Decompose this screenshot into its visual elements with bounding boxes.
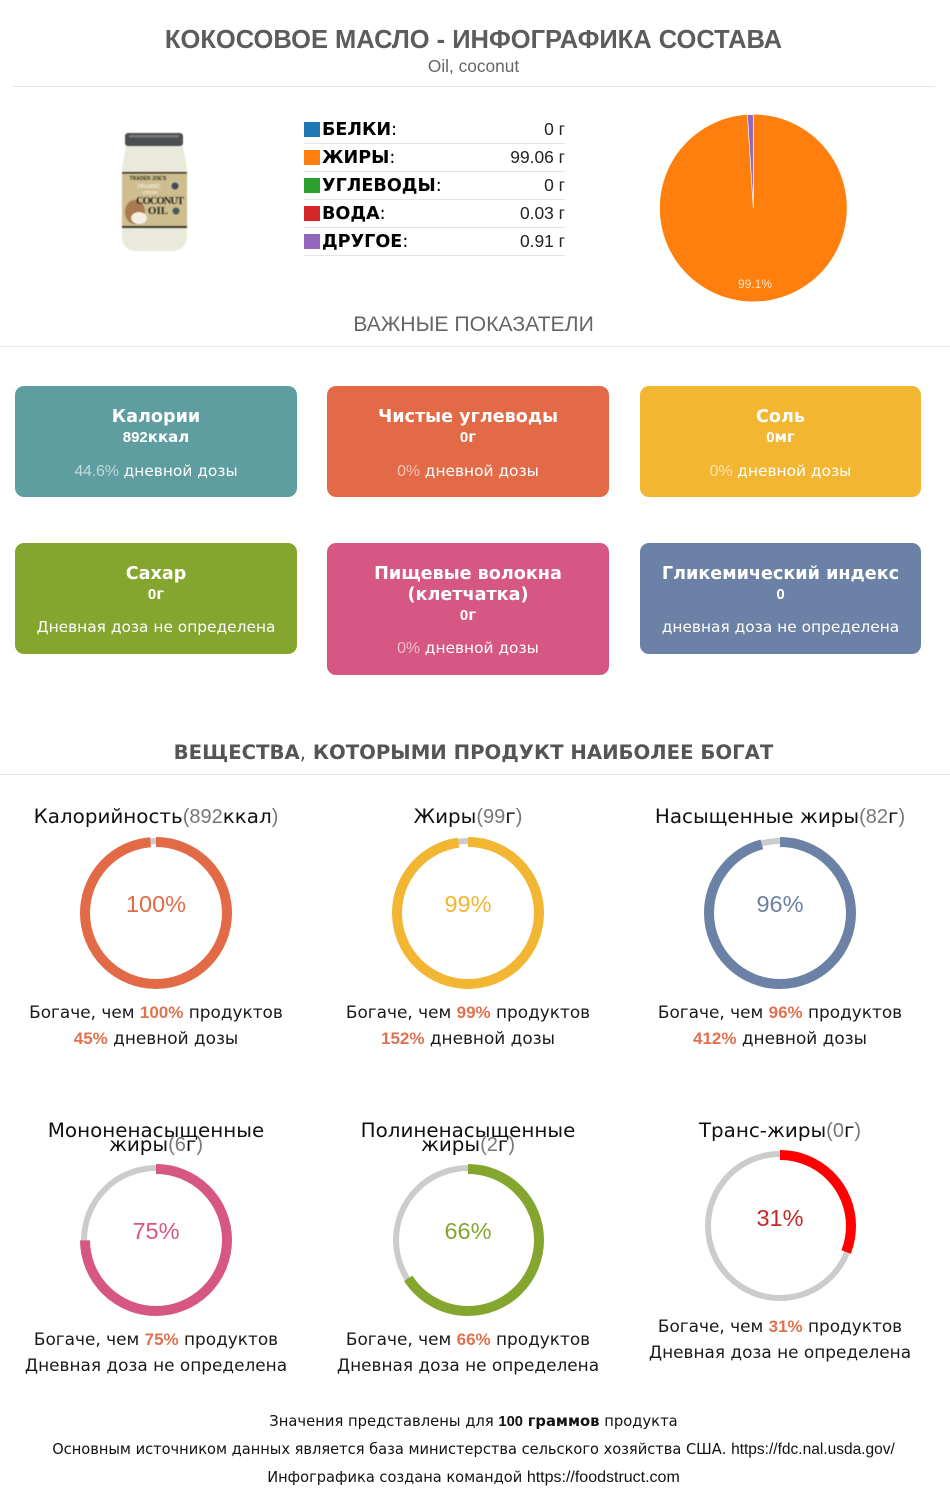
row: fat xyxy=(304,143,565,172)
panel: polyunsaturated fat ring xyxy=(337,1119,599,1375)
panel: monounsaturated fat ring: жиры(6г) xyxy=(109,1133,203,1156)
card: fiber: 0г xyxy=(460,606,476,624)
row: water xyxy=(304,199,565,228)
card: sugar: 0г xyxy=(148,585,164,603)
panel: monounsaturated fat ring: Богаче, чем 75% продуктов xyxy=(34,1329,278,1349)
card: calories: 44.6% дневной дозы xyxy=(74,462,238,480)
panel: trans fat ring: Богаче, чем 31% продуктов xyxy=(658,1316,902,1336)
panel: monounsaturated fat ring xyxy=(25,1119,287,1375)
row: other: ДРУГОЕ: xyxy=(322,232,408,252)
subtitle: Oil, coconut xyxy=(428,56,519,76)
panel: saturated fat ring: Богаче, чем 96% продуктов xyxy=(658,1002,902,1022)
panel: polyunsaturated fat ring: Полиненасыщенные xyxy=(361,1119,575,1142)
card: glycemic index: дневная доза не определена xyxy=(662,618,899,636)
panel: fat ring: Жиры(99г) xyxy=(414,805,522,828)
panel: calories ring: Богаче, чем 100% продуктов xyxy=(29,1002,283,1022)
pie chart xyxy=(660,114,847,302)
ring chart: 75% xyxy=(80,1164,232,1316)
card: net carbs: 0% дневной дозы xyxy=(397,462,539,480)
panel: trans fat ring: 31% xyxy=(756,1205,804,1231)
panel: trans fat ring xyxy=(649,1119,911,1362)
pie chart: 99.1% xyxy=(738,277,772,291)
panel: polyunsaturated fat ring: жиры(2г) xyxy=(421,1133,515,1156)
card: sugar: Дневная доза не определена xyxy=(37,618,275,636)
panel: saturated fat ring xyxy=(655,805,905,1048)
row: other xyxy=(304,227,565,256)
panel: fat ring: 152% дневной дозы xyxy=(381,1028,555,1048)
row: fat: ЖИРЫ: xyxy=(322,148,395,168)
card: net carbs xyxy=(327,386,609,497)
card: glycemic index: Гликемический индекс xyxy=(662,564,899,584)
panel: calories ring xyxy=(29,805,283,1048)
card: glycemic index: 0 xyxy=(776,586,785,603)
footer notes xyxy=(52,1413,895,1486)
ring chart: 96% xyxy=(704,837,856,989)
ring chart: 100% xyxy=(80,837,232,989)
panel: saturated fat ring: Насыщенные жиры(82г) xyxy=(655,805,905,828)
row: water: ВОДА: xyxy=(322,204,386,224)
row: carbs: УГЛЕВОДЫ: xyxy=(322,176,442,196)
card: net carbs: Чистые углеводы xyxy=(378,407,558,427)
card: calories xyxy=(15,386,297,497)
panel: fat ring: 99% xyxy=(444,891,492,917)
panel: monounsaturated fat ring: Мононенасыщенные xyxy=(48,1119,264,1142)
panel: saturated fat ring: 96% xyxy=(756,891,804,917)
card: calories: 892ккал xyxy=(123,428,189,446)
heading: richest nutrients: ВЕЩЕСТВА, КОТОРЫМИ ПРОДУКТ НАИБОЛЕЕ БОГАТ xyxy=(174,741,773,764)
note: data source: Основным источником данных является база министерства сельского хозяйства США. https://fdc.nal.usda.gov/ xyxy=(52,1441,895,1458)
panel: trans fat ring: Дневная доза не определена xyxy=(649,1342,911,1362)
note: credits: Инфографика создана командой https://foodstruct.com xyxy=(267,1469,680,1486)
panel: fat ring xyxy=(346,805,590,1048)
card: sugar xyxy=(15,543,297,654)
panel: trans fat ring: Транс-жиры(0г) xyxy=(699,1119,861,1142)
row: protein: БЕЛКИ: xyxy=(322,120,397,140)
card: calories: Калории xyxy=(112,407,200,427)
nutrient table xyxy=(304,119,565,256)
icon: coconut oil jar: TRADER JOE'S xyxy=(130,176,167,182)
ring chart: 31% xyxy=(705,1150,856,1301)
ring chart: 99% xyxy=(392,837,544,989)
title: КОКОСОВОЕ МАСЛО - ИНФОГРАФИКА СОСТАВА xyxy=(165,26,782,54)
icon: coconut oil jar: VIRGIN xyxy=(142,190,158,195)
panel: monounsaturated fat ring: 75% xyxy=(132,1218,180,1244)
card: fiber: Пищевые волокна xyxy=(374,564,562,584)
ring chart: 66% xyxy=(393,1164,544,1316)
panel: polyunsaturated fat ring: Дневная доза не определена xyxy=(337,1355,599,1375)
heading: key indicators: ВАЖНЫЕ ПОКАЗАТЕЛИ xyxy=(353,313,594,336)
icon: coconut oil jar: OIL xyxy=(148,205,168,217)
row: other: 0.91 г xyxy=(520,231,565,251)
panel: polyunsaturated fat ring: Богаче, чем 66% продуктов xyxy=(346,1329,590,1349)
note: per 100 grams: Значения представлены для 100 граммов продукта xyxy=(269,1413,678,1430)
panel: calories ring: Калорийность(892ккал) xyxy=(34,805,278,828)
panel: saturated fat ring: 412% дневной дозы xyxy=(693,1028,867,1048)
card: glycemic index xyxy=(640,543,921,654)
card: salt xyxy=(640,386,921,497)
panel: monounsaturated fat ring: Дневная доза не определена xyxy=(25,1355,287,1375)
card: fiber: 0% дневной дозы xyxy=(397,639,539,657)
row: protein: 0 г xyxy=(544,119,565,139)
card: salt: Соль xyxy=(756,407,805,427)
panel: calories ring: 100% xyxy=(126,891,186,917)
card: sugar: Сахар xyxy=(126,564,186,584)
panel: fat ring: Богаче, чем 99% продуктов xyxy=(346,1002,590,1022)
row: protein xyxy=(304,115,565,144)
row: fat: 99.06 г xyxy=(510,147,565,167)
card: salt: 0% дневной дозы xyxy=(710,462,851,480)
panel: polyunsaturated fat ring: 66% xyxy=(444,1218,492,1244)
row: water: 0.03 г xyxy=(520,203,565,223)
icon: coconut oil jar: COCONUT xyxy=(136,196,184,207)
icon: coconut oil jar xyxy=(121,132,188,252)
card: fiber: (клетчатка) xyxy=(408,585,528,605)
card: salt: 0мг xyxy=(766,428,795,446)
card: net carbs: 0г xyxy=(460,428,476,446)
row: carbs xyxy=(304,171,565,200)
card: fiber xyxy=(327,543,609,675)
panel: calories ring: 45% дневной дозы xyxy=(74,1028,238,1048)
row: carbs: 0 г xyxy=(544,175,565,195)
icon: coconut oil jar: ORGANIC xyxy=(137,184,161,190)
